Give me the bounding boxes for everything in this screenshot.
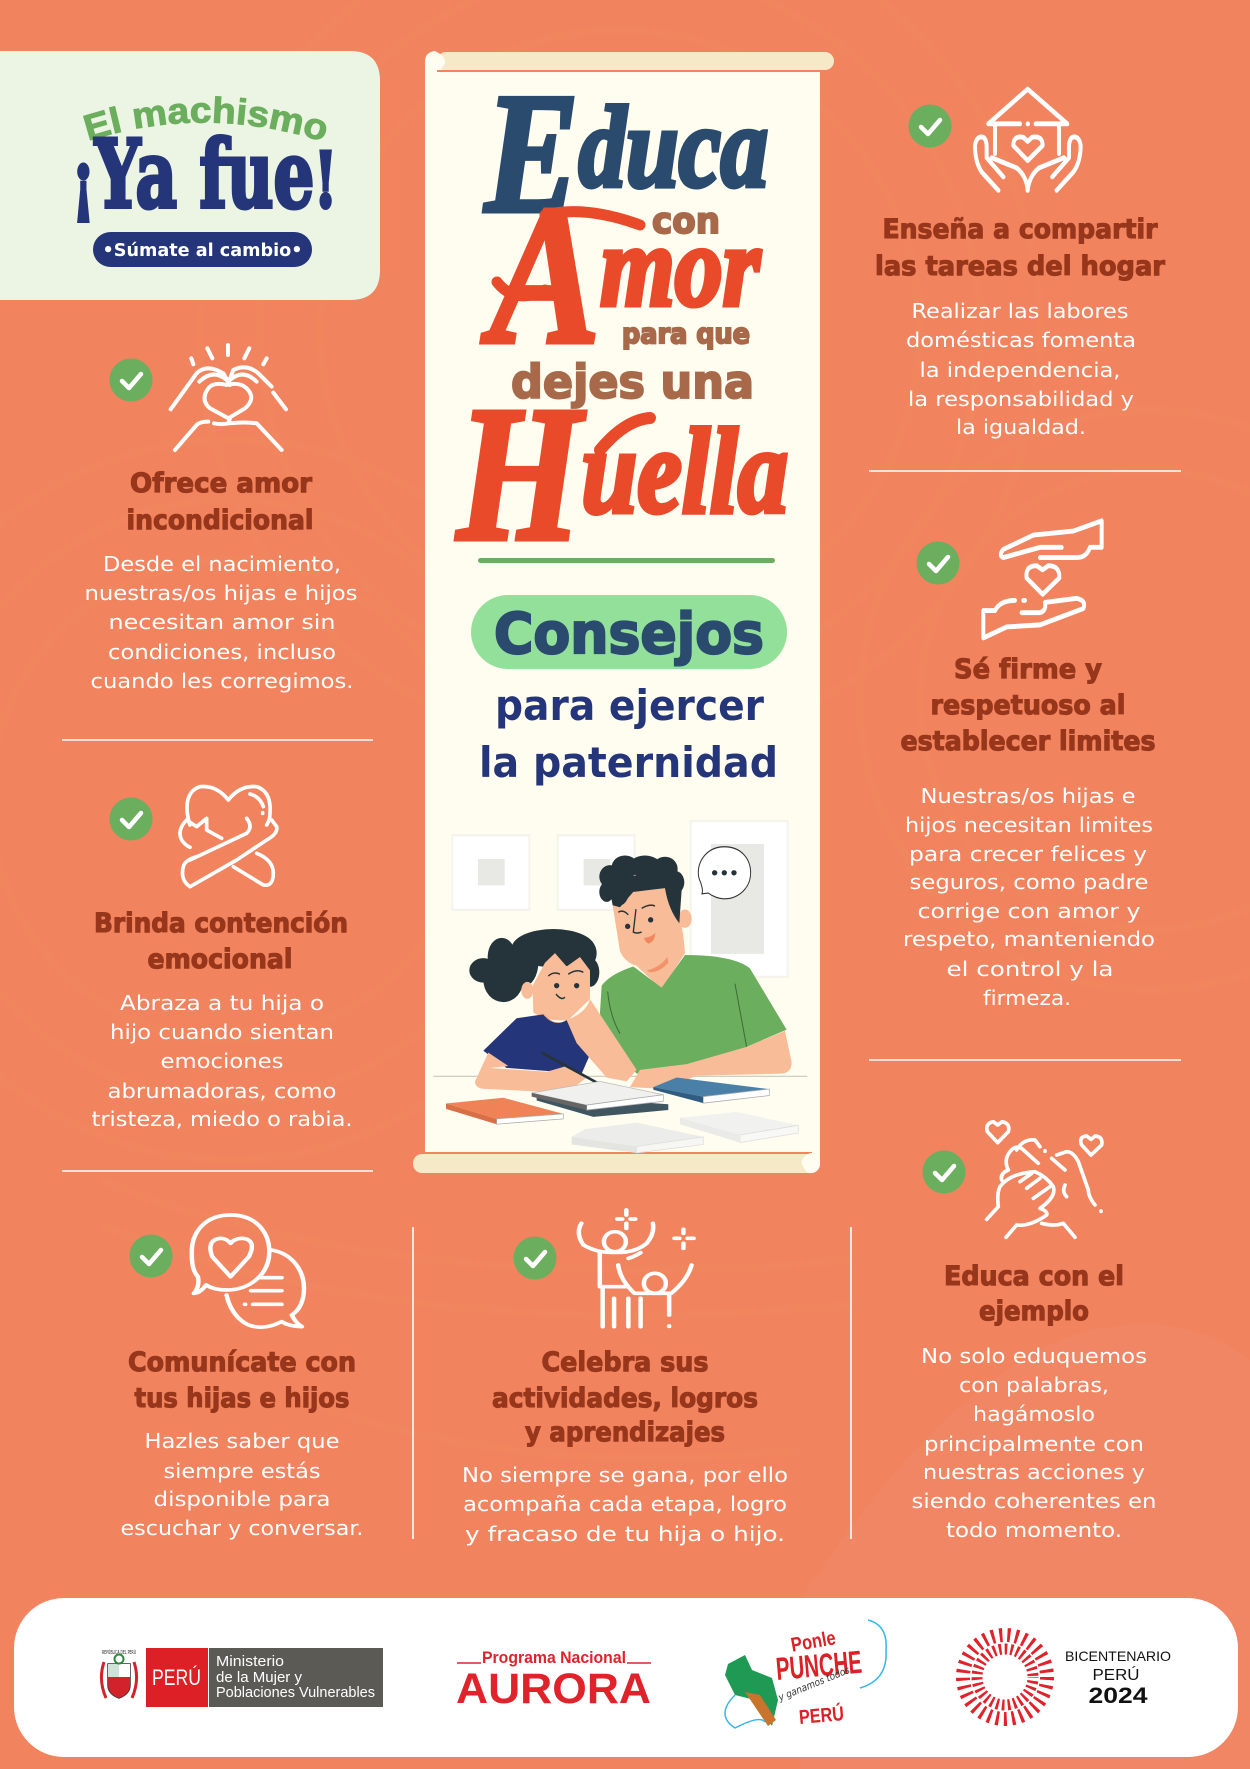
text: Se firme body: seguros, como padre — [910, 870, 1148, 894]
text: Ofrece amor body: necesitan amor sin — [108, 610, 336, 634]
text: Ofrece amor body: Desde el nacimiento, — [103, 552, 341, 576]
heading: Educa con el ejemplo: Educa con el — [944, 1261, 1124, 1292]
heading: Ensena a compartir — [875, 214, 1166, 282]
text: Ensena body — [906, 299, 1136, 439]
text: Comunicate body — [120, 1429, 364, 1540]
icon: speech bubbles with heart — [192, 1215, 304, 1327]
text: Celebra body: acompaña cada etapa, logro — [463, 1492, 787, 1516]
text: Educa con el ejemplo body: con palabras, — [959, 1373, 1109, 1397]
heading: Educa con el ejemplo: ejemplo — [979, 1296, 1089, 1327]
text: Brinda contencion body: Abraza a tu hija o — [120, 991, 324, 1015]
text: Ofrece amor body — [84, 552, 358, 693]
logo: Bicentenario Peru 2024: BICENTENARIO — [1065, 1648, 1171, 1664]
title word: con: con — [652, 201, 720, 242]
text: Educa con el ejemplo body: nuestras acciones y — [923, 1460, 1145, 1484]
logo pill: Sumate al cambio — [93, 232, 312, 267]
heading: Comunicate con tus hijas e hijos: tus hijas e hijos — [134, 1383, 350, 1414]
logo: Bicentenario Peru 2024: 2024 — [1088, 1683, 1148, 1708]
title words: dejes una: dejes una — [511, 355, 754, 409]
logo: Ministerio de la Mujer: de la Mujer y — [216, 1669, 302, 1686]
logo: Ponle Punche Peru — [725, 1620, 886, 1729]
heading: Se firme y respetuoso — [900, 654, 1156, 757]
text: Brinda contencion body: tristeza, miedo o rabia. — [92, 1107, 352, 1131]
text: Ofrece amor body: condiciones, incluso — [108, 640, 336, 664]
text: Brinda contencion body: hijo cuando sientan — [110, 1020, 334, 1044]
text: Celebra body: No siempre se gana, por ello — [462, 1463, 788, 1487]
logo: Programa Nacional Aurora: Programa Nacional — [482, 1648, 626, 1667]
text: Ensena body: la responsabilidad y — [908, 387, 1134, 411]
text: Educa con el ejemplo body: siendo coherentes en — [912, 1489, 1156, 1513]
text: Se firme body: Nuestras/os hijas e — [920, 784, 1136, 808]
logo: Ministerio de la Mujer — [146, 1648, 383, 1707]
heading: Se firme y respetuoso: establecer limites — [900, 726, 1156, 757]
heading: Celebra sus actividades: Celebra sus — [542, 1347, 708, 1378]
heading: Ensena a compartir: las tareas del hogar — [875, 251, 1166, 282]
text: Se firme body — [903, 784, 1155, 1010]
heading: Brinda contencion emocional: Brinda contención — [94, 908, 348, 939]
check: Se firme — [916, 542, 960, 584]
logo: Ministerio de la Mujer: Ministerio — [216, 1653, 284, 1670]
title word: Huella — [455, 366, 788, 581]
books and notebook — [446, 1078, 798, 1153]
icon: heart hands — [171, 345, 286, 450]
text: Se firme body: hijos necesitan limites — [905, 813, 1153, 837]
text: Se firme body: el control y la — [946, 957, 1114, 981]
title word: Amor: A — [481, 165, 600, 386]
logo panel: El machismo ya fue — [0, 51, 380, 300]
title words: para que: para que — [622, 317, 750, 350]
logo: Peru coat of arms — [101, 1649, 137, 1698]
title word: Huella: H — [455, 366, 586, 581]
heading: Educa con el ejemplo — [944, 1261, 1124, 1327]
logo: Ponle Punche Peru: Ponle — [789, 1627, 837, 1657]
speech bubble — [698, 847, 751, 899]
logo: Ministerio de la Mujer: Poblaciones Vulnerables — [216, 1684, 375, 1701]
heading: Celebra sus actividades — [492, 1347, 758, 1448]
title word: Amor: mor — [600, 203, 761, 331]
text: Brinda contencion body — [92, 991, 352, 1131]
text: Comunicate body: Hazles saber que — [144, 1429, 340, 1453]
title word: Amor — [481, 165, 761, 386]
father — [599, 856, 792, 1089]
illustration: father and daughter studying — [433, 821, 807, 1153]
heading: Brinda contencion emocional: emocional — [148, 944, 292, 975]
text: Comunicate body: siempre estás — [164, 1459, 320, 1483]
heading: Celebra sus actividades: actividades, logros — [492, 1383, 758, 1414]
check: Educa con el ejemplo — [922, 1150, 966, 1194]
check: Ofrece amor — [110, 358, 152, 402]
text: Brinda contencion body: emociones — [160, 1049, 284, 1073]
heading: Comunicate con tus hijas e hijos — [128, 1347, 356, 1414]
text: Se firme body: para crecer felices y — [909, 842, 1147, 866]
heading: Se firme y respetuoso: respetuoso al — [930, 690, 1126, 721]
check: Comunicate — [130, 1234, 172, 1278]
subtitle: para ejercer la paternidad — [479, 681, 778, 787]
text: Ensena body: domésticas fomenta — [906, 328, 1136, 352]
footer panel: logos — [14, 1598, 1238, 1757]
text: Ofrece amor body: nuestras/os hijas e hijos — [84, 581, 358, 605]
title word: Huella: uella — [581, 404, 788, 539]
text: Educa con el ejemplo body: No solo eduquemos — [921, 1344, 1147, 1368]
text: Ofrece amor body: cuando les corregimos. — [90, 669, 354, 693]
heading: Ofrece amor incondicional: incondicional — [126, 505, 314, 536]
icon: heart hugged by crossed arms — [180, 786, 277, 887]
text: Se firme body: corrige con amor y — [918, 899, 1140, 923]
icon: adult and child hands with hearts — [987, 1122, 1102, 1237]
icon: adult and child celebrating — [579, 1210, 694, 1327]
text: Brinda contencion body: abrumadoras, como — [108, 1079, 336, 1103]
central scroll panel — [413, 51, 834, 1173]
logo: Ponle Punche Peru: y ganamos todos — [776, 1665, 852, 1704]
heading: Ofrece amor incondicional — [126, 468, 314, 536]
text: Educa con el ejemplo body — [912, 1344, 1156, 1542]
logo text: El machismo: El machismo — [83, 96, 326, 141]
icon: house in hands — [975, 89, 1081, 190]
heading: Comunicate con tus hijas e hijos: Comunícate con — [128, 1347, 356, 1378]
text: Se firme body: respeto, manteniendo — [903, 927, 1155, 951]
check: Celebra — [514, 1236, 556, 1280]
title word: Educa: E — [483, 59, 579, 249]
logo: Ponle Punche Peru: PUNCHE — [774, 1644, 863, 1687]
text: Comunicate body: disponible para — [154, 1487, 330, 1511]
text: Educa con el ejemplo body: hagámoslo — [973, 1402, 1095, 1426]
title word: Educa: duca — [579, 84, 768, 212]
text: Ensena body: la independencia, — [920, 358, 1120, 382]
icon: hands protecting heart — [983, 521, 1102, 638]
text: Educa con el ejemplo body: principalmente con — [924, 1432, 1144, 1456]
check: Ensena — [908, 104, 952, 148]
text: Ensena body: Realizar las labores — [912, 299, 1128, 323]
logo: Peru coat of arms: REPÚBLICA DEL PERÚ — [102, 1649, 136, 1656]
logo: Ponle Punche Peru: PERÚ — [798, 1701, 845, 1729]
daughter — [469, 929, 637, 1093]
pill: Consejos: Consejos — [494, 602, 764, 667]
heading: Ofrece amor incondicional: Ofrece amor — [130, 468, 313, 499]
subtitle: para ejercer la paternidad: la paternidad — [479, 738, 778, 787]
heading: Brinda contencion emocional — [94, 908, 348, 975]
logo: Ministerio de la Mujer: PERÚ — [152, 1665, 201, 1690]
text: Celebra body: y fracaso de tu hija o hijo. — [465, 1522, 785, 1546]
text: Celebra body — [462, 1463, 788, 1546]
text: Se firme body: firmeza. — [983, 986, 1071, 1010]
logo: Bicentenario Peru 2024: PERÚ — [1092, 1665, 1140, 1684]
text: Ensena body: la igualdad. — [956, 415, 1086, 439]
check: Brinda contencion — [110, 798, 152, 840]
heading: Ensena a compartir: Enseña a compartir — [882, 214, 1158, 245]
heading: Se firme y respetuoso: Sé firme y — [954, 654, 1102, 685]
logo: Programa Nacional Aurora: AURORA — [456, 1665, 651, 1713]
title: Educa con Amor para que dejes una Huella — [455, 59, 788, 581]
text: Educa con el ejemplo body: todo momento. — [946, 1518, 1122, 1542]
text: Comunicate body: escuchar y conversar. — [120, 1516, 364, 1540]
logo pill: Sumate al cambio: •Súmate al cambio• — [102, 240, 302, 261]
logo: Bicentenario Peru 2024 — [963, 1635, 1171, 1719]
heading: Celebra sus actividades: y aprendizajes — [525, 1417, 725, 1448]
logo text: Ya fue: ¡Ya fue! — [72, 120, 337, 230]
green rule — [478, 558, 775, 563]
subtitle: para ejercer la paternidad: para ejercer — [495, 681, 764, 730]
